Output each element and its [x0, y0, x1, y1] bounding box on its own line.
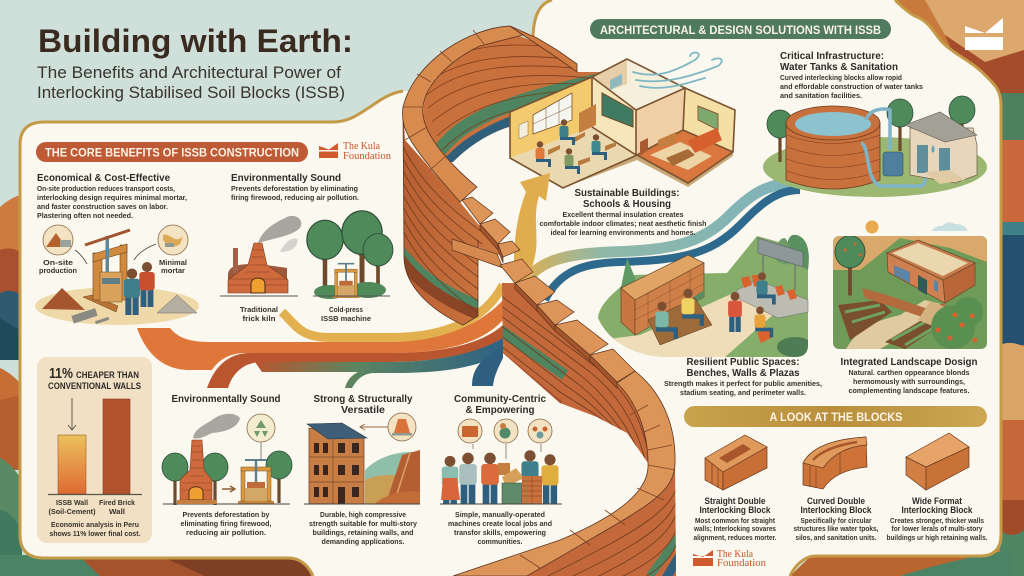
illustration: on-site block making: production [39, 266, 77, 275]
benefit: environmentally sound lower: reducing air pollution. [186, 528, 266, 537]
illustration: traditional kiln [220, 216, 301, 323]
icon: recycle [247, 414, 275, 461]
arrow: gold arrow up to buildings [514, 173, 550, 285]
illustration: traditional kiln: frick kiln [242, 314, 276, 323]
block: curved double interlocking: silos, and sanitation units. [796, 533, 876, 542]
chart heading: CHEAPER THAN [76, 370, 139, 380]
benefit: community centric: transfor skills, empowering [454, 528, 546, 537]
bar chart: Fired Brick [99, 498, 136, 507]
text: sustainable buildings: ideal for learning environments and homes. [550, 228, 696, 237]
heading pill: core benefits: THE CORE BENEFITS OF ISSB CONSTRUCTION [45, 146, 299, 160]
wall cap: stair bricks [452, 197, 635, 388]
subtitle [37, 63, 345, 102]
text: public spaces [664, 356, 822, 397]
sun and cloud [866, 220, 968, 234]
subtitle: The Benefits and Architectural Power of [37, 63, 341, 82]
text: integrated landscape design [840, 356, 978, 395]
wall: upper inner face [423, 35, 600, 170]
block: curved double interlocking: Interlocking Block [800, 505, 872, 516]
chart note [50, 520, 140, 538]
block: wide format interlocking: for lower lerals of multi-story [892, 524, 983, 533]
benefit: strong and versatile: strength suitable for multi-story [309, 519, 418, 528]
benefit text: economical: interlocking design requires minimal mortar, [37, 193, 187, 202]
benefit text: environmentally sound top [231, 172, 359, 202]
logo: Kula Foundation top [319, 141, 391, 162]
text: critical infrastructure: Critical Infrastructure: [780, 50, 884, 62]
benefit: community centric [440, 393, 562, 546]
benefit: environmentally sound lower [162, 393, 292, 537]
text: sustainable buildings [540, 187, 707, 237]
icon: on-site production [43, 225, 73, 255]
benefit: strong and versatile: demanding applications. [322, 537, 404, 546]
block: curved double interlocking: Specifically for circular [800, 516, 872, 525]
logo: white mark [965, 18, 1003, 50]
block: straight double interlocking: Most common for straight [695, 516, 775, 525]
text: integrated landscape design: Natural. carthen oppearance blonds [848, 368, 970, 377]
wall cap: lower curve [453, 371, 675, 576]
block: curved double interlocking: Curved Double [807, 496, 865, 507]
benefit text: economical [37, 172, 187, 220]
icon: minimal mortar [158, 225, 188, 255]
benefit: community centric: communities. [478, 537, 522, 546]
logo: Kula Foundation bottom: Foundation [717, 558, 766, 569]
benefit text: environmentally sound top: Prevents deforestation by eliminating [231, 184, 358, 193]
illustration: water tank and sanitation [763, 96, 987, 197]
text: public spaces: Resilient Public Spaces: [686, 356, 800, 368]
logo: Kula Foundation top: Foundation [343, 151, 391, 162]
illustration: cold press with trees: ISSB machine [321, 314, 371, 323]
text: public spaces: stadium seating, and perimeter walls. [680, 388, 806, 397]
illustration: on-site block making: Minimal [159, 258, 187, 267]
illustration: public spaces [598, 234, 809, 357]
bar chart: ISSB Wall [56, 498, 88, 507]
flow ribbons [137, 183, 800, 388]
benefit: strong and versatile: Durable, high compressive [320, 510, 406, 519]
logo: Kula Foundation top: The Kula [343, 141, 381, 152]
block: wide format interlocking [886, 433, 988, 542]
title [37, 23, 353, 102]
benefit: community centric: Simple, manually-operated [455, 510, 545, 519]
text: critical infrastructure: and sanitation facilities. [780, 91, 862, 100]
benefit: strong and versatile: buildings, retaining walls, and [312, 528, 414, 537]
illustration: on-site block making [35, 225, 199, 325]
block: curved double interlocking [794, 437, 878, 542]
icon: people [528, 419, 552, 443]
illustration: on-site block making: On-site [43, 258, 73, 267]
chart note: shows 11% lower final cost. [50, 529, 140, 538]
text: critical infrastructure: and effordable construction of water tanks [780, 82, 923, 91]
panel: cost comparison chart [37, 357, 152, 543]
heading pill: blocks [684, 406, 987, 427]
text: integrated landscape design: complementing landscape features. [848, 386, 970, 395]
benefit text: economical: and faster construction saves on labor. [37, 202, 168, 211]
benefit: environmentally sound lower: Environmentally Sound [172, 393, 280, 405]
title: Building with Earth: [38, 23, 353, 59]
text: sustainable buildings: Sustainable Buildings: [574, 187, 680, 199]
benefit: community centric: machines create local jobs and [448, 519, 552, 528]
wind swirls [633, 53, 722, 88]
block: straight double interlocking: Straight Double [704, 496, 766, 507]
logo: Kula Foundation bottom: The Kula [717, 549, 754, 560]
chart note: Economic analysis in Peru [51, 520, 139, 529]
text: critical infrastructure: Curved interlecking blocks allow ropid [780, 73, 902, 82]
text: public spaces: Benches, Walls & Plazas [686, 367, 800, 379]
benefit: strong and versatile: Strong & Structurally [314, 393, 413, 405]
subtitle: Interlocking Stabilised Soil Blocks (ISSB) [37, 83, 345, 102]
block: wide format interlocking: Interlocking Block [902, 505, 973, 516]
benefit text: economical: Economical & Cost-Effective [37, 172, 170, 184]
benefit text: environmentally sound top: Environmentally Sound [231, 172, 341, 184]
landscape: right edge and corner block [790, 0, 1024, 576]
block: straight double interlocking: Interlocking Block [700, 505, 771, 516]
chart heading: CONVENTIONAL WALLS [48, 381, 141, 391]
illustration: cold press with trees: Cold-press [329, 305, 363, 314]
chart heading: 11% [49, 365, 73, 382]
icon: briefcase [458, 419, 482, 443]
icon: skills [494, 419, 518, 443]
heading pill: blocks: A LOOK AT THE BLOCKS [770, 410, 902, 424]
bar chart: Wall [109, 507, 125, 516]
heading pill: architectural solutions: ARCHITECTURAL & DESIGN SOLUTIONS WITH ISSB [600, 23, 881, 37]
illustration: on-site block making: mortar [161, 266, 185, 275]
illustration: cold press with trees [307, 211, 393, 323]
wall: brick serpentine [398, 26, 680, 576]
benefit: community centric: Community-Centric [454, 393, 546, 405]
wall cap: upper curve [403, 26, 577, 202]
benefit: strong and versatile [304, 393, 420, 546]
bar chart: (Soil-Cement) [48, 507, 96, 516]
illustration: school and housing cutaway [510, 59, 735, 188]
block: wide format interlocking: Creates stronger, thicker walls [890, 516, 984, 525]
text: critical infrastructure [780, 50, 923, 100]
benefit: environmentally sound lower: eliminating firing firewood, [180, 519, 272, 528]
block: straight double interlocking: walls; Interlocking sovares [693, 524, 776, 533]
block: wide format interlocking: buildings ur high retaining walls. [886, 533, 988, 542]
wall lower outer face [527, 463, 680, 576]
text: sustainable buildings: comfortable indoor climates; neat aesthetic finish [540, 219, 707, 228]
landscape: left hills [0, 195, 318, 576]
logo: Kula Foundation bottom [693, 549, 766, 569]
text: sustainable buildings: Excellent thermal insulation creates [562, 210, 684, 219]
benefit: strong and versatile: Versatile [341, 404, 385, 416]
block: wide format interlocking: Wide Format [912, 496, 963, 507]
benefit: environmentally sound lower: Prevents deforestation by [182, 510, 270, 519]
heading pill: core benefits [36, 142, 308, 162]
benefit text: economical: On-site production reduces transport costs, [37, 184, 175, 193]
icon: compressive strength [388, 413, 416, 441]
benefit text: economical: Plastering often not needed. [37, 211, 133, 220]
text: integrated landscape design: hermomously with surroundings, [853, 377, 965, 386]
benefit: community centric: & Empowering [466, 404, 534, 416]
wall upper outer face [398, 107, 503, 325]
illustration: traditional kiln: Traditional [240, 305, 278, 314]
block: straight double interlocking [693, 435, 776, 542]
benefit text: environmentally sound top: firing firewood, reducing air pollution. [231, 193, 359, 202]
chart heading [48, 365, 141, 391]
bar chart [48, 398, 142, 516]
heading pill: architectural solutions [590, 19, 891, 39]
wall lower straight face [500, 283, 650, 465]
text: public spaces: Strength makes it perfect for public amenities, [664, 379, 822, 388]
text: integrated landscape design: Integrated Landscape Dosign [840, 356, 978, 368]
text: sustainable buildings: Schools & Housing [583, 198, 671, 210]
illustration: integrated landscape [833, 236, 987, 349]
block: curved double interlocking: structures like water tpoks, [794, 524, 878, 533]
block: straight double interlocking: alignment, reduces morter. [694, 533, 776, 542]
text: critical infrastructure: Water Tanks & Sanitation [780, 61, 898, 73]
